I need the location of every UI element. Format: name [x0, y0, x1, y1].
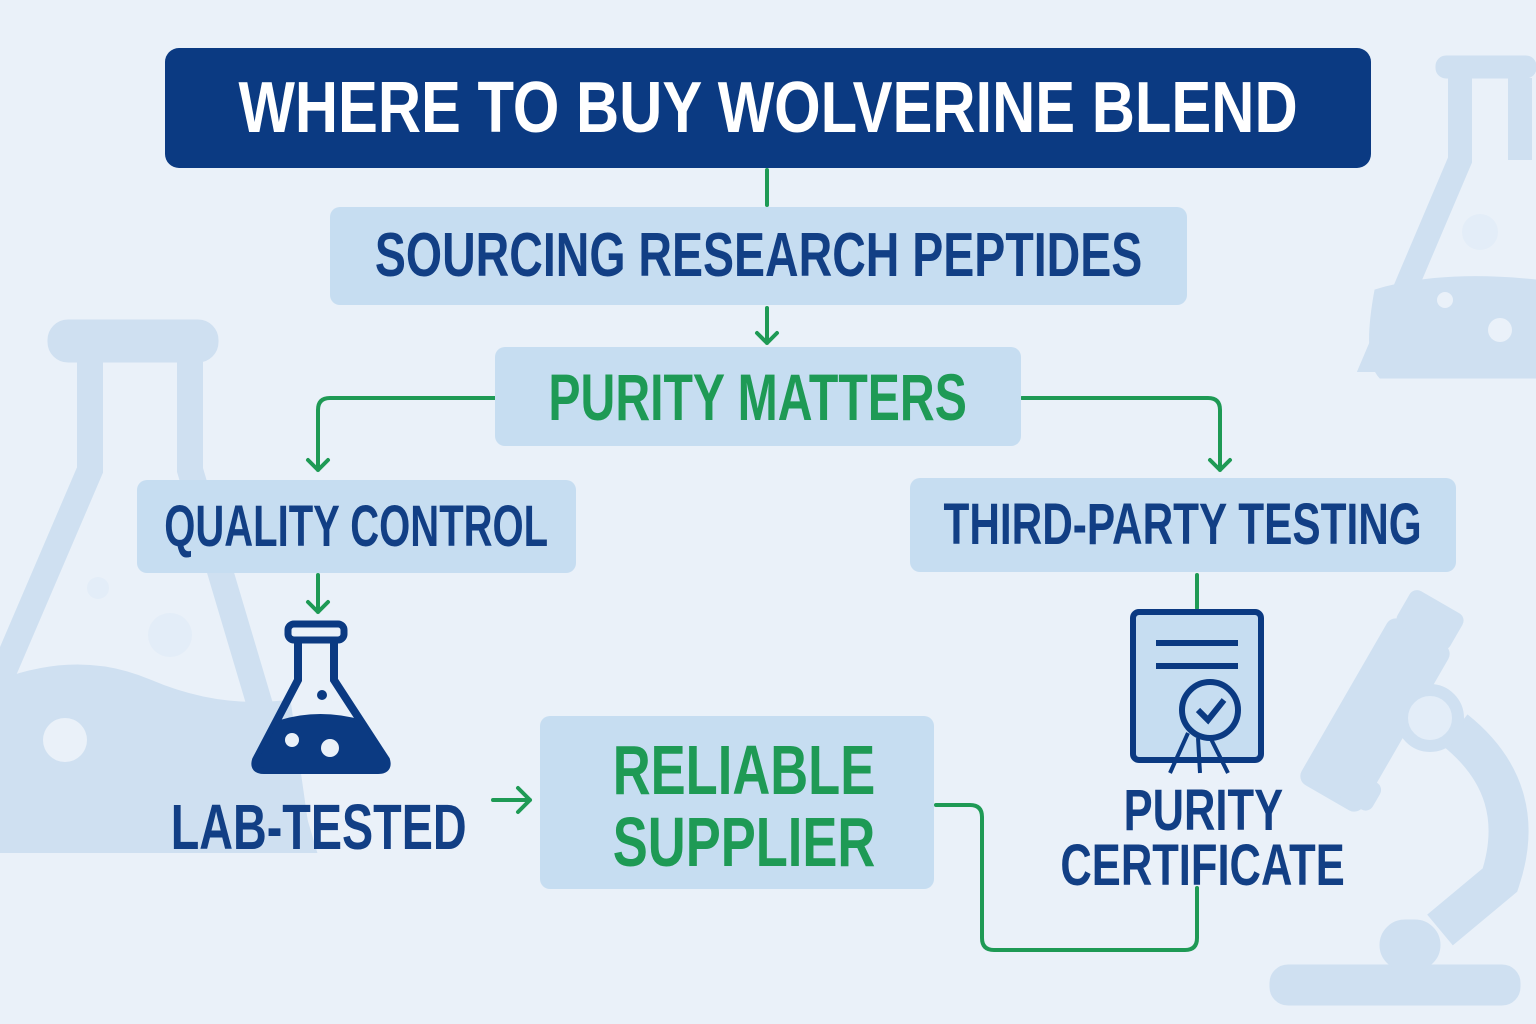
text: purity certificate	[1061, 778, 1345, 898]
box: purity matters: PURITY MATTERS	[549, 360, 967, 434]
box: third-party testing	[910, 478, 1456, 572]
box: purity matters	[495, 347, 1021, 446]
box: reliable supplier: RELIABLE	[613, 730, 875, 808]
text: purity certificate: PURITY	[1123, 778, 1283, 843]
box: quality control: QUALITY CONTROL	[165, 494, 548, 558]
box: reliable supplier	[540, 716, 934, 889]
box: reliable supplier: SUPPLIER	[613, 802, 875, 880]
title	[165, 48, 1371, 168]
left flask	[48, 320, 218, 362]
title: WHERE TO BUY WOLVERINE BLEND	[238, 68, 1298, 148]
microscope	[1270, 965, 1520, 1005]
box: third-party testing: THIRD-PARTY TESTING	[944, 492, 1422, 557]
right flask	[1436, 56, 1536, 78]
box: sourcing research peptides: SOURCING RESEARCH PEPTIDES	[375, 221, 1142, 290]
box: quality control	[137, 480, 576, 573]
text: lab-tested: LAB-TESTED	[171, 791, 467, 863]
box: sourcing research peptides	[330, 207, 1187, 305]
icon: certificate	[1130, 609, 1264, 774]
icon: flask	[251, 620, 391, 774]
text: purity certificate: CERTIFICATE	[1061, 833, 1345, 898]
